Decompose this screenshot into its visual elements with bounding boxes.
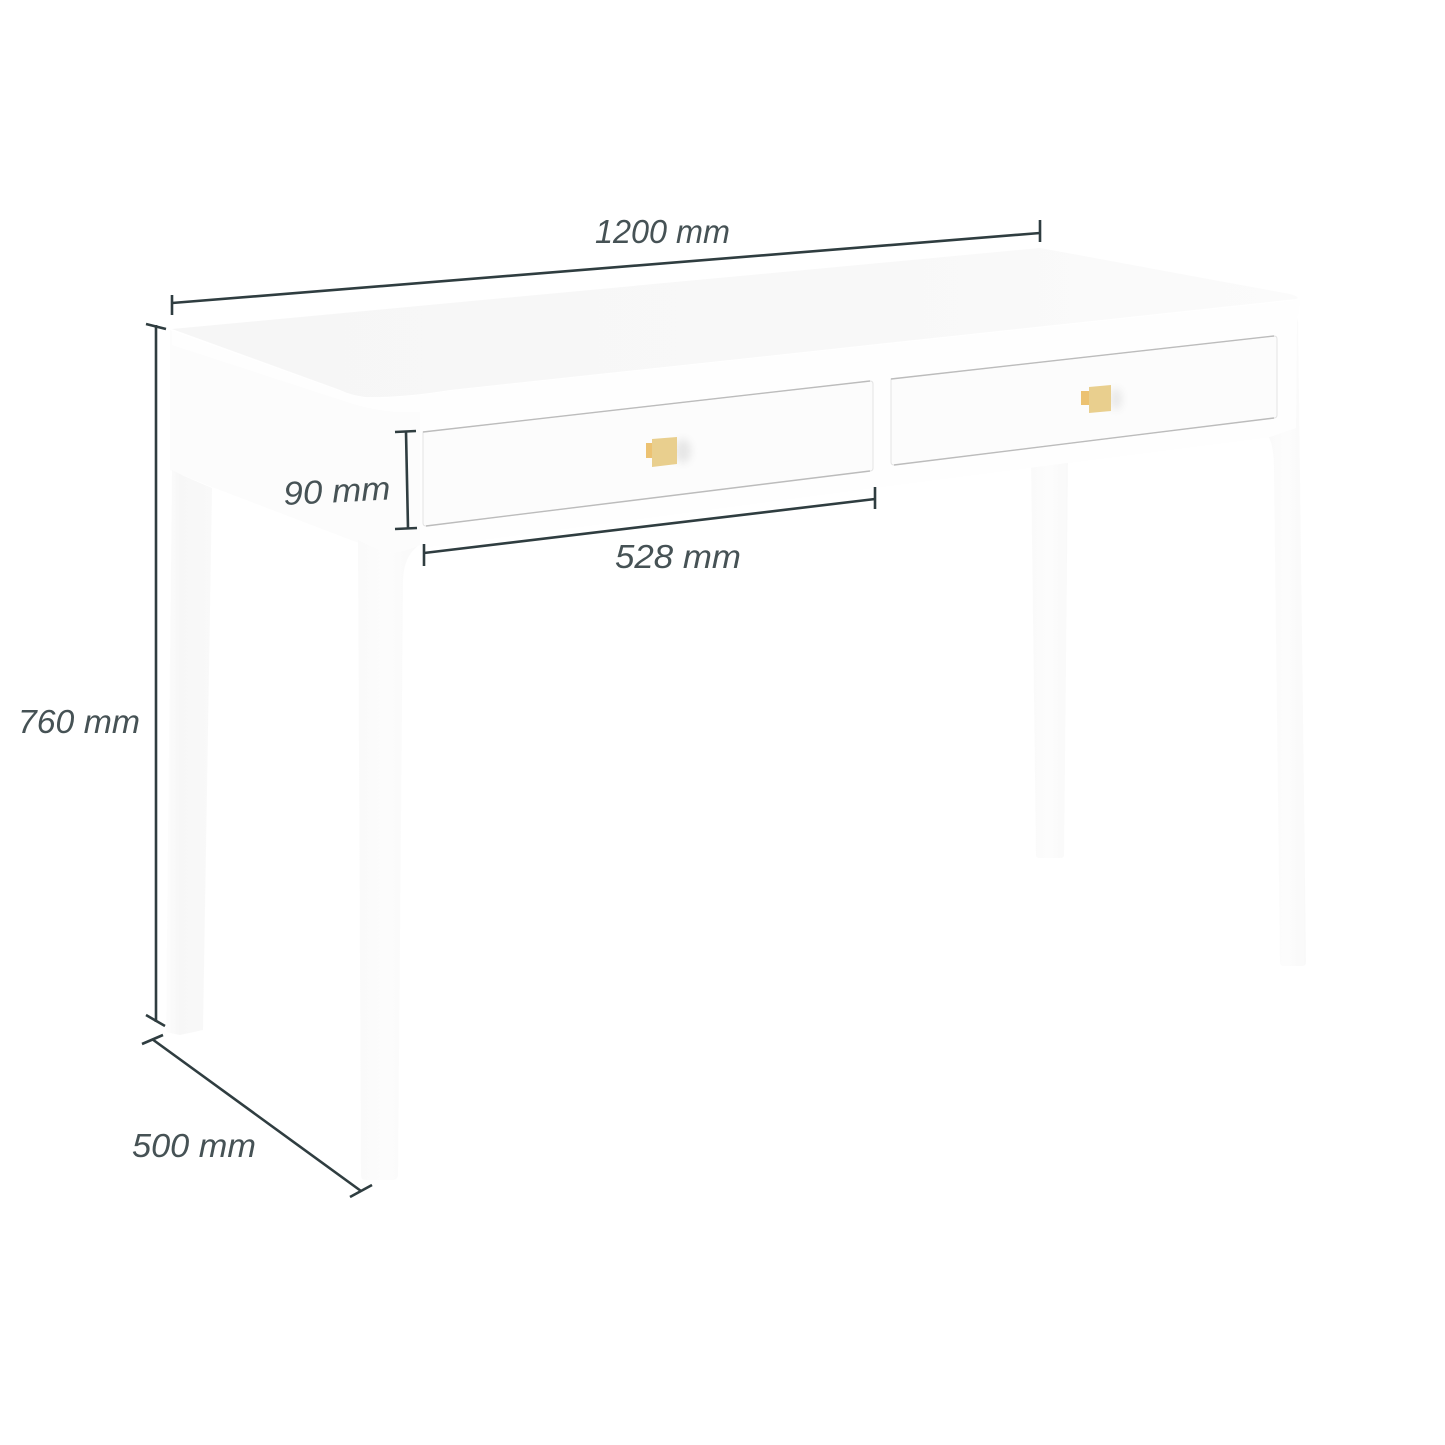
left drawer [423,381,873,526]
dimension: drawer height 90 mm: 90 mm [282,469,391,512]
side apron [170,330,420,553]
dimension: drawer height 90 mm [282,431,417,529]
dimension: height 760 mm: 760 mm [18,703,140,740]
front right leg [1268,318,1306,966]
front apron [420,316,1297,548]
dimension: drawer width 528 mm: 528 mm [615,538,741,575]
dimension: drawer width 528 mm [424,487,875,575]
table top front edge [172,300,1300,412]
dimension: depth 500 mm: 500 mm [132,1127,256,1164]
rear left leg [1031,460,1068,858]
table top surface [172,248,1298,397]
side left leg [166,470,212,1035]
dimension: width 1200 mm [172,213,1040,315]
dimension: height 760 mm [18,324,166,1026]
right drawer handle [1081,385,1122,413]
right drawer [891,336,1277,465]
front left leg [358,540,418,1180]
dimension: depth 500 mm [132,1035,372,1197]
dimension: width 1200 mm: 1200 mm [595,213,730,250]
left drawer handle [646,437,691,467]
white desk [166,248,1306,1180]
